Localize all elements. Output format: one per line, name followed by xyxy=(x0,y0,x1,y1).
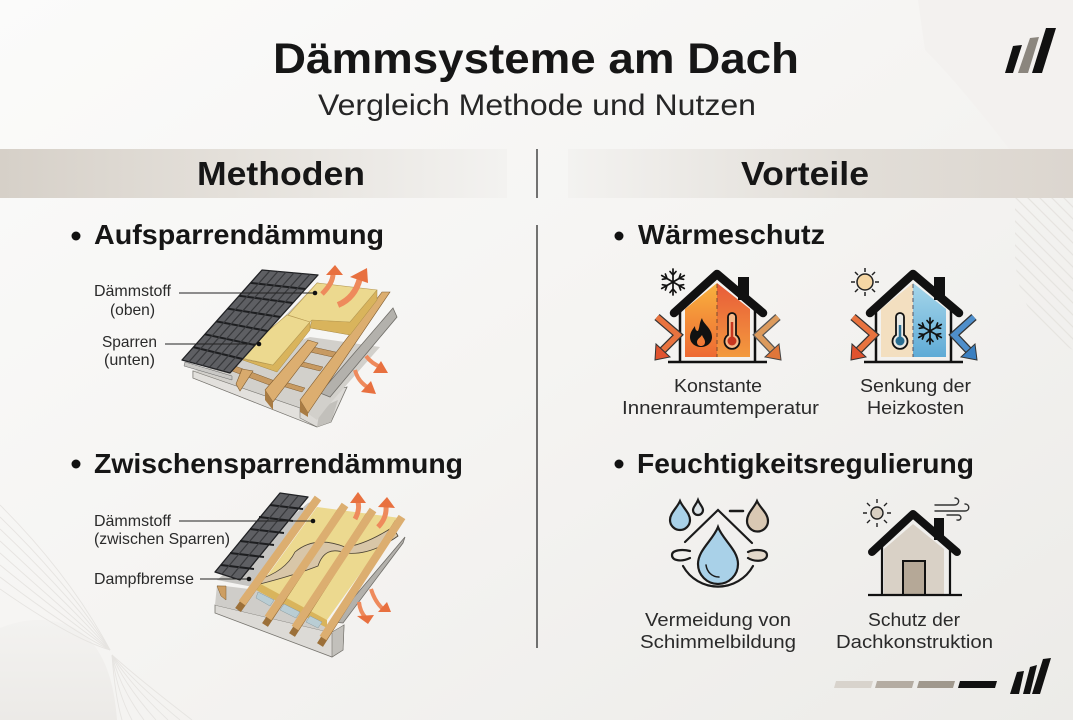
header band: Vorteile xyxy=(568,149,1073,198)
arrows: heat escaping xyxy=(350,492,395,624)
label: Dämmstoff (oben): (oben) xyxy=(110,302,155,319)
title: Dämmsysteme am Dach xyxy=(273,35,799,83)
arrows: heat escaping xyxy=(322,265,388,394)
icon: thermometer hot xyxy=(725,313,740,349)
panel: Feuchtigkeitsregulierung xyxy=(614,448,993,652)
header band: Methoden: Methoden xyxy=(197,155,365,192)
caption: Schutz der Dachkonstruktion xyxy=(836,610,993,652)
label: Dämmstoff (zwischen Sparren): (zwischen Sparren) xyxy=(94,531,230,548)
icon: house with heat xyxy=(655,269,781,362)
label: Dämmstoff (zwischen Sparren) xyxy=(94,513,315,548)
label: Sparren (unten) xyxy=(102,334,261,369)
heading: Feuchtigkeitsregulierung: Feuchtigkeitsregulierung xyxy=(637,448,974,479)
caption: Vermeidung von Schimmelbildung xyxy=(640,610,796,652)
roof diagram: Aufsparrendämmung xyxy=(182,265,397,427)
label: Dämmstoff (oben): Dämmstoff xyxy=(94,283,172,300)
caption: Senkung der Heizkosten: Heizkosten xyxy=(867,398,964,418)
heading: Wärmeschutz: Wärmeschutz xyxy=(638,219,825,250)
roof diagram: Zwischensparrendämmung xyxy=(215,492,405,657)
icon: house with sun and wind xyxy=(863,498,969,595)
progress bars footer xyxy=(834,681,997,688)
icon: flame xyxy=(690,318,712,347)
caption: Vermeidung von Schimmelbildung: Vermeidung von xyxy=(645,610,791,630)
label: Sparren (unten): Sparren xyxy=(102,334,157,351)
logo bottom right xyxy=(1010,658,1051,694)
logo top right xyxy=(1005,28,1056,73)
label: Dämmstoff (oben) xyxy=(94,283,317,319)
column divider xyxy=(536,149,538,648)
caption: Konstante Innenraumtemperatur: Konstante xyxy=(674,376,762,396)
label: Dämmstoff (zwischen Sparren): Dämmstoff xyxy=(94,513,172,530)
caption: Konstante Innenraumtemperatur xyxy=(622,376,819,418)
caption: Schutz der Dachkonstruktion: Schutz der xyxy=(868,610,960,630)
label: Dampfbremse xyxy=(94,571,251,588)
caption: Senkung der Heizkosten: Senkung der xyxy=(860,376,971,396)
icon: house with sun and cold xyxy=(851,268,977,362)
heading: Zwischensparrendämmung: Zwischensparrendämmung xyxy=(94,448,463,479)
panel: Zwischensparrendämmung xyxy=(72,448,463,657)
caption: Senkung der Heizkosten xyxy=(860,376,971,418)
subtitle: Vergleich Methode und Nutzen xyxy=(318,89,756,122)
heading: Aufsparrendämmung: Aufsparrendämmung xyxy=(94,219,384,250)
label: Dampfbremse: Dampfbremse xyxy=(94,571,194,588)
header band: Methoden xyxy=(0,149,507,198)
caption: Konstante Innenraumtemperatur: Innenraumtemperatur xyxy=(622,398,819,418)
label: Sparren (unten): (unten) xyxy=(104,352,155,369)
icon: water drops xyxy=(670,500,768,587)
caption: Vermeidung von Schimmelbildung: Schimmelbildung xyxy=(640,632,796,652)
panel: Wärmeschutz xyxy=(614,219,977,418)
panel: Aufsparrendämmung xyxy=(72,219,397,427)
header band: Vorteile: Vorteile xyxy=(741,155,869,192)
caption: Schutz der Dachkonstruktion: Dachkonstruktion xyxy=(836,632,993,652)
